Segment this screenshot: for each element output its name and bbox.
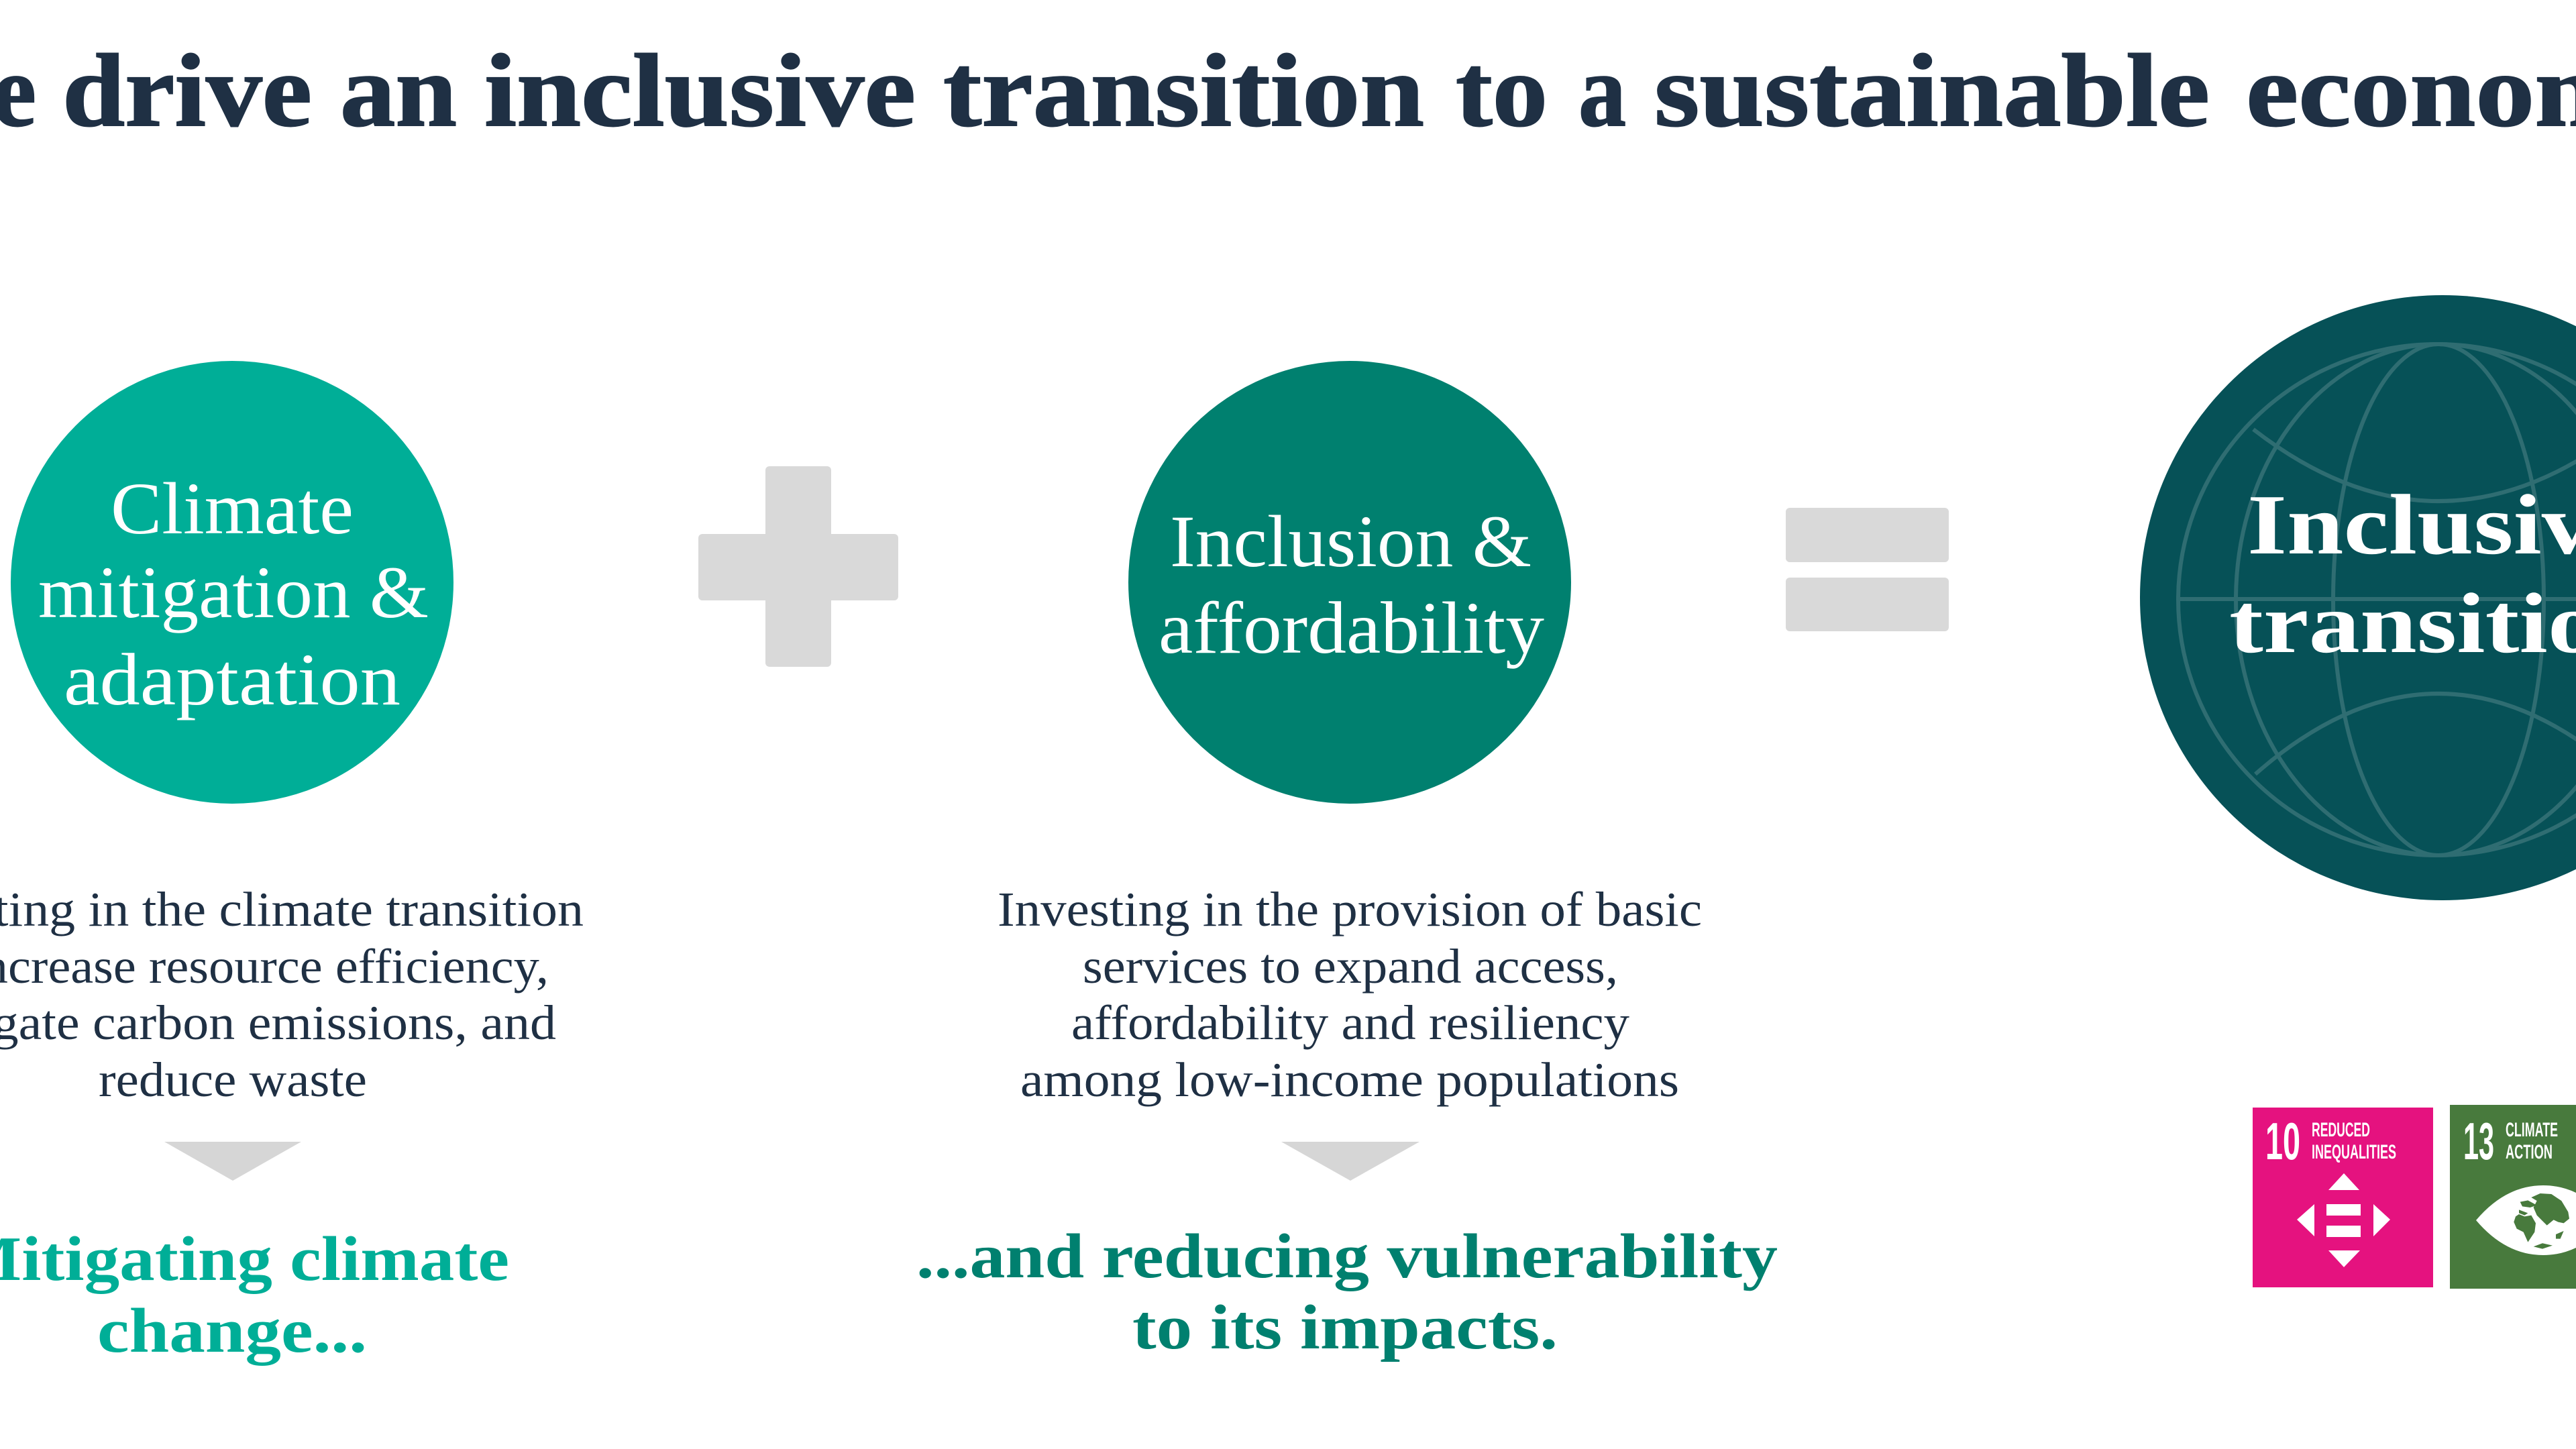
icon: SDG 13 climate action <box>2450 1105 2576 1289</box>
arrow: inclusion down arrow <box>1281 1142 1419 1181</box>
title: a <box>1578 33 1626 148</box>
icon: SDG 10 reduced inequalities: REDUCED <box>2312 1119 2370 1141</box>
callout: mitigating climate change: change... <box>97 1296 367 1366</box>
panel: inclusive transition globe <box>2140 295 2576 900</box>
panel: climate mitigation circle: Climate <box>111 468 354 549</box>
panel: climate mitigation circle <box>11 361 453 804</box>
icon: equals sign <box>1786 508 1949 631</box>
text block: climate description: reduce waste <box>99 1053 367 1107</box>
arrow: climate down arrow <box>164 1142 301 1181</box>
title: inclusive <box>484 33 916 148</box>
title <box>0 33 2576 148</box>
icon: SDG 10 reduced inequalities: INEQUALITIES <box>2312 1141 2396 1163</box>
panel: inclusion and affordability circle <box>1128 361 1571 804</box>
callout: reducing vulnerability <box>916 1222 1778 1362</box>
callout: mitigating climate change <box>0 1224 509 1366</box>
title: sustainable <box>1654 33 2210 148</box>
icon: SDG 13 climate action: 13 <box>2463 1112 2494 1171</box>
icon: SDG 10 reduced inequalities <box>2253 1108 2433 1287</box>
title: an <box>340 33 457 148</box>
panel: inclusion and affordability circle: Inclusion & <box>1170 500 1532 582</box>
text block: inclusion description: Investing in the provision of basic <box>998 882 1702 936</box>
panel: climate mitigation circle: mitigation & <box>38 551 429 633</box>
icon: plus sign <box>698 466 898 667</box>
text block: inclusion description: affordability and resiliency <box>1071 996 1630 1050</box>
panel: inclusion and affordability circle: affordability <box>1159 587 1544 669</box>
icon: SDG 10 reduced inequalities: 10 <box>2265 1112 2300 1171</box>
title: to <box>1456 33 1548 148</box>
callout: reducing vulnerability: ...and reducing vulnerability <box>916 1222 1778 1291</box>
title: drive <box>62 33 312 148</box>
panel: climate mitigation circle: adaptation <box>64 639 400 720</box>
text block: inclusion description: among low-income populations <box>1020 1053 1679 1107</box>
text block: inclusion description <box>998 882 1702 1107</box>
panel: inclusive transition globe: Inclusive <box>2247 477 2576 572</box>
callout: reducing vulnerability: to its impacts. <box>1132 1293 1558 1362</box>
text block: climate description <box>0 882 584 1107</box>
icon: globe grid <box>2178 344 2576 855</box>
text block: inclusion description: services to expand access, <box>1083 939 1618 994</box>
title: transition <box>943 33 1424 148</box>
